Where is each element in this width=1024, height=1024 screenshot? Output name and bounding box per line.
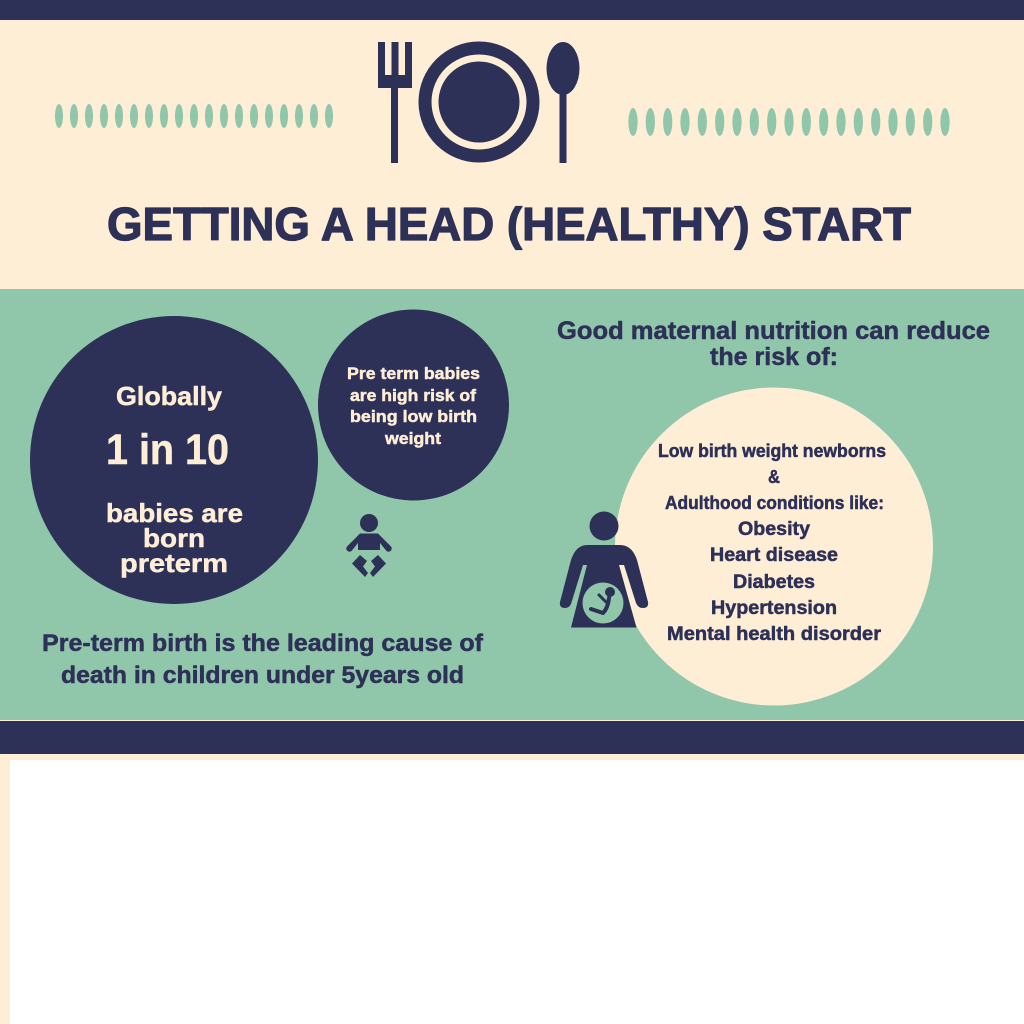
callout: globally 1 in 10: preterm xyxy=(120,548,228,578)
callout: globally 1 in 10: born xyxy=(143,523,205,553)
callout: low birth weight risk: weight xyxy=(384,429,441,448)
callout: globally 1 in 10: babies are xyxy=(106,498,243,528)
decorative dots: left xyxy=(55,104,333,128)
callout: low birth weight risk: are high risk of xyxy=(350,386,476,405)
icon: spoon xyxy=(546,42,580,163)
callout: low birth weight risk: Pre term babies xyxy=(347,364,480,383)
panel: green content xyxy=(0,289,1024,720)
panel: header xyxy=(0,20,1024,289)
top bar xyxy=(0,0,1024,20)
decorative dots: right xyxy=(628,108,950,136)
heading: maternal nutrition: Good maternal nutrition can reduce xyxy=(557,317,990,345)
heading: maternal nutrition xyxy=(557,317,990,371)
bottom bar xyxy=(0,721,1024,754)
icon: plate xyxy=(418,42,540,162)
callout: globally 1 in 10 xyxy=(30,316,318,604)
callout: globally 1 in 10: Globally xyxy=(116,381,223,411)
callout: conditions list: Hypertension xyxy=(711,598,837,619)
callout: low birth weight risk xyxy=(318,310,509,500)
icon: pregnant woman xyxy=(560,512,648,628)
callout: conditions list xyxy=(615,388,933,706)
text: leading cause of death xyxy=(42,630,484,689)
callout: conditions list: Diabetes xyxy=(733,572,815,593)
title: GETTING A HEAD (HEALTHY) START xyxy=(107,198,911,250)
callout: conditions list: & xyxy=(768,467,780,487)
callout: conditions list: Heart disease xyxy=(710,545,838,566)
heading: maternal nutrition: the risk of: xyxy=(710,343,838,371)
callout: conditions list: Adulthood conditions like: xyxy=(665,493,884,513)
text: leading cause of death: Pre-term birth is the leading cause of xyxy=(42,630,484,657)
callout: conditions list: Obesity xyxy=(738,519,810,540)
callout: low birth weight risk: being low birth xyxy=(350,407,477,426)
icon: baby xyxy=(346,514,392,577)
callout: globally 1 in 10: 1 in 10 xyxy=(106,426,229,474)
icon: fork xyxy=(378,42,412,163)
callout: conditions list: Mental health disorder xyxy=(667,624,882,645)
callout: conditions list: Low birth weight newborns xyxy=(658,441,886,461)
text: leading cause of death: death in children under 5years old xyxy=(61,662,464,689)
